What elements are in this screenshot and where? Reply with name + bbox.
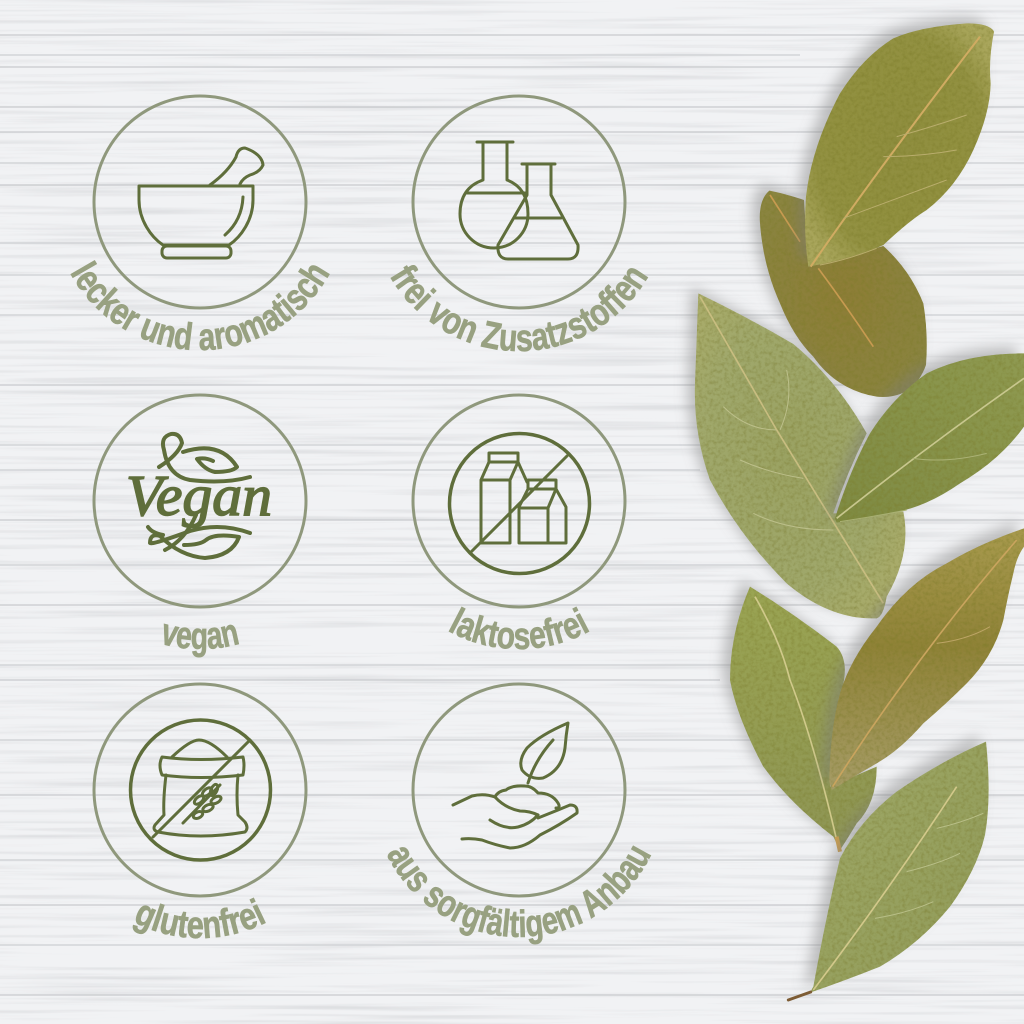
leaf: top olive leaf [805,23,994,267]
leaf: lower left green leaf [730,587,877,852]
icon: plant growing from hand [453,723,577,848]
leaf: bronze right leaf [829,528,1024,790]
panel: glutenfrei [92,682,308,939]
leaf: bottom green leaf [788,742,989,1000]
panel: aus sorgfältigem Anbau [388,682,652,944]
leaf: brown lower top leaf [760,191,927,397]
label: lecker und aromatisch: lecker und aromatisch [70,260,330,351]
label: aus sorgfältigem Anbau: aus sorgfältigem Anbau [388,845,652,944]
label: glutenfrei: glutenfrei [132,898,266,939]
icon: mortar and pestle [139,148,263,258]
icon: vegan script logo [126,434,272,558]
leaf: large green leaf [695,293,905,618]
panel: lecker und aromatisch [70,94,330,351]
panel: frei von Zusatzstoffen [390,94,648,352]
icon: laboratory flasks [460,142,578,259]
leaf: right green leaf [835,353,1024,523]
icon: crossed-out grain sack [130,720,270,860]
panel: vegan [92,394,308,658]
label: laktosefrei: laktosefrei [448,606,590,650]
icon: crossed-out milk cartons [450,434,590,574]
bay leaves branch [695,23,1024,1000]
panel: laktosefrei [412,394,626,650]
icon: vegan script logo: Vegan [126,463,272,528]
label: vegan: vegan [164,624,240,658]
label: frei von Zusatzstoffen: frei von Zusatzstoffen [390,265,648,352]
